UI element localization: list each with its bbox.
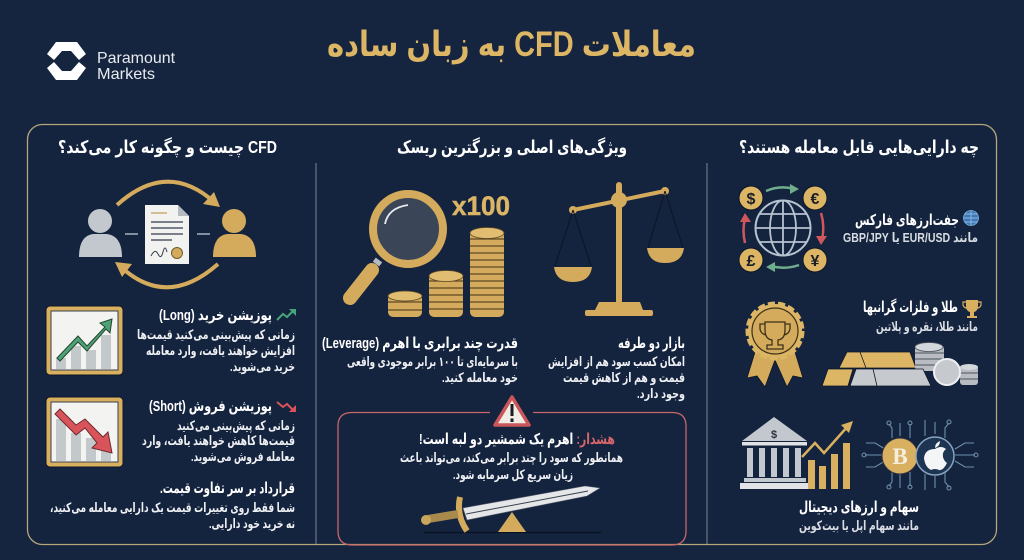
icon: warning triangle <box>495 397 529 425</box>
metals text: طلا و فلزات گرانبها <box>863 298 958 316</box>
contract for difference note <box>50 480 295 531</box>
outer frame <box>28 124 996 544</box>
stocks and crypto text: سهام و ارزهای دیجیتال <box>799 499 919 516</box>
callout: leverage warning <box>338 397 686 545</box>
icon: globe with currencies: € <box>811 191 820 208</box>
icon: globe with currencies: ¥ <box>811 253 820 270</box>
title: معاملات CFD به زبان ساده <box>327 25 696 65</box>
icon: globe with currencies <box>739 184 827 272</box>
long position text <box>137 307 296 374</box>
icon: short chart <box>46 397 123 467</box>
logo: Paramount <box>97 50 176 67</box>
two-way market text: قیمت و هم از کاهش قیمت <box>563 370 685 385</box>
label: x100: x100 <box>452 191 510 221</box>
heading: what is CFD: CFD چیست و چگونه کار می‌کند؟ <box>58 137 277 158</box>
metals text <box>863 298 981 334</box>
long position text: زمانی که پیش‌بینی می‌کنید قیمت‌ها <box>137 327 295 342</box>
stocks and crypto text: مانند سهام اپل یا بیت‌کوین <box>799 518 919 534</box>
two-way market text: امکان کسب سود هم از افزایش <box>548 354 685 369</box>
warning body: زیان سریع کل سرمایه شود. <box>453 467 573 482</box>
stocks and crypto text <box>799 499 919 534</box>
icon: medal <box>747 304 803 387</box>
leverage text: خود معامله کنید. <box>442 370 518 385</box>
short position text <box>142 398 296 464</box>
icon: double-edged sword on fulcrum <box>421 486 601 532</box>
contract for difference note: قرارداد بر سر تفاوت قیمت. <box>160 480 295 497</box>
icon: magnifier <box>350 194 443 298</box>
icon: long chart <box>46 306 123 375</box>
icon: metal bars and coins <box>822 342 978 386</box>
two-way market text: بازار دو طرفه <box>618 335 685 352</box>
icon: bitcoin and apple on circuit: B <box>892 444 908 469</box>
icon: balance scale <box>554 182 684 316</box>
metals text: مانند طلا، نقره و پلاتین <box>876 319 978 334</box>
warning body <box>400 450 623 482</box>
short position text: معامله فروش می‌شوید. <box>191 449 295 464</box>
icon: bitcoin and apple on circuit <box>862 420 978 490</box>
diagram: contract between two parties <box>79 182 256 287</box>
panel: features and risk <box>317 125 707 545</box>
forex text <box>843 210 978 245</box>
icon: globe with currencies: $ <box>747 191 756 208</box>
icon: bank and rising bars: $ <box>771 429 777 441</box>
forex text: مانند EUR/USD یا GBP/JPY <box>843 230 978 245</box>
short position text: قیمت‌ها کاهش خواهند یافت، وارد <box>142 433 295 448</box>
icon: coin stacks <box>388 228 504 317</box>
logo <box>47 42 176 83</box>
contract for difference note: شما فقط روی تغییرات قیمت یک دارایی معامله می‌کنید، <box>50 500 295 515</box>
icon: globe with currencies: £ <box>747 253 756 270</box>
warning body: همانطور که سود را چند برابر می‌کند، می‌تواند باعث <box>400 450 623 465</box>
leverage text: با سرمایه‌ای تا ۱۰۰ برابر موجودی واقعی <box>347 354 518 369</box>
two-way market text <box>548 335 685 401</box>
contract for difference note: نه خرید خود دارایی. <box>209 516 295 531</box>
long position text: پوزیشن خرید (Long) <box>159 307 272 325</box>
panel: what is CFD <box>28 125 316 544</box>
logo: Markets <box>97 66 155 83</box>
heading: features and risk: ویژگی‌های اصلی و بزرگترین ریسک <box>397 137 627 158</box>
forex text: جفت‌ارزهای فارکس <box>855 212 959 229</box>
short position text: پوزیشن فروش (Short) <box>149 398 272 416</box>
two-way market text: وجود دارد. <box>637 386 685 401</box>
icon: bank and rising bars <box>740 417 853 489</box>
leverage text <box>322 335 518 385</box>
short position text: زمانی که پیش‌بینی می‌کنید <box>177 418 295 433</box>
long position text: افزایش خواهند یافت، وارد معامله <box>146 343 295 358</box>
warning heading: هشدار: اهرم یک شمشیر دو لبه است! <box>419 431 615 448</box>
long position text: خرید می‌شوید. <box>230 359 295 374</box>
leverage text: قدرت چند برابری با اهرم (Leverage) <box>322 335 518 353</box>
panel: tradable assets <box>708 125 996 544</box>
